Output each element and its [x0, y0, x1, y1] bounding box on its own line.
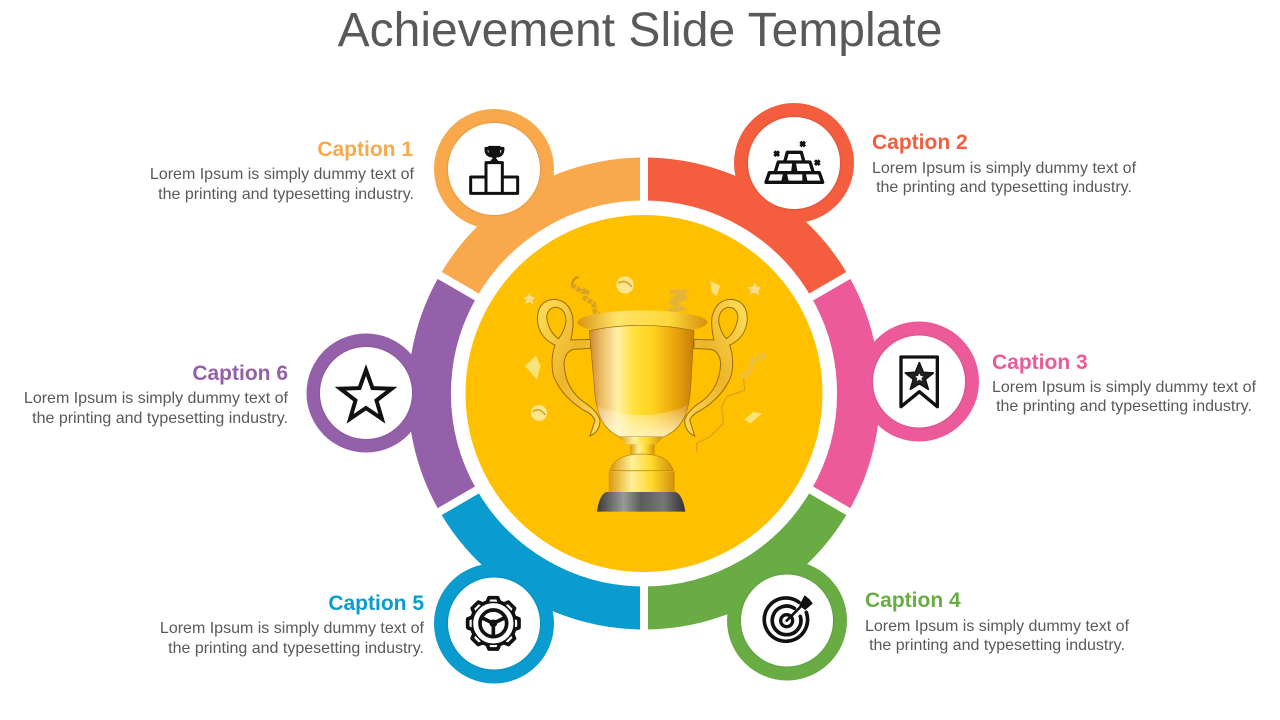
segment 4 green	[644, 501, 830, 608]
text: caption 2: Caption 2	[872, 131, 968, 154]
callout circle 2	[734, 103, 854, 223]
text: caption 4: Lorem Ipsum is simply dummy text of	[865, 618, 1130, 635]
text: caption 6: Lorem Ipsum is simply dummy text of	[24, 390, 289, 407]
text: caption 5: Caption 5	[328, 592, 424, 615]
text: caption 2: Lorem Ipsum is simply dummy text of	[872, 160, 1137, 177]
icon: gold bars	[766, 142, 823, 182]
title: Achievement Slide Template	[338, 4, 942, 57]
text: caption 1: Caption 1	[317, 138, 413, 161]
ring of six segments	[429, 179, 859, 608]
segment 5 blue	[458, 501, 644, 608]
text: caption 5: Lorem Ipsum is simply dummy text of	[160, 620, 425, 637]
callout circle 5	[434, 564, 554, 684]
text: caption 3	[992, 351, 1257, 415]
segment 2 red	[644, 179, 830, 286]
segment 3 pink	[830, 286, 859, 501]
text: caption 5	[160, 592, 425, 657]
rim	[577, 310, 707, 334]
callout circle 1	[434, 109, 554, 229]
text: caption 3: the printing and typesetting industry.	[996, 398, 1252, 415]
text: caption 1	[150, 138, 415, 203]
callout circle 6	[306, 334, 426, 452]
confetti	[523, 276, 765, 452]
text: caption 4	[865, 589, 1130, 654]
cup highlight	[596, 405, 688, 437]
text: caption 3: Caption 3	[992, 351, 1088, 374]
callout circle 4	[727, 560, 847, 680]
text: caption 6: Caption 6	[192, 362, 288, 385]
segment 6 purple	[429, 286, 458, 501]
text: caption 1: Lorem Ipsum is simply dummy text of	[150, 166, 415, 183]
icon: gear with steering wheel	[468, 598, 519, 649]
callout circle 3	[859, 322, 979, 442]
text: caption 6	[24, 362, 289, 427]
segment 1 orange	[458, 179, 644, 286]
icon: target with arrow	[764, 597, 811, 641]
icon: podium trophy	[471, 147, 518, 193]
text: caption 3: Lorem Ipsum is simply dummy text of	[992, 379, 1257, 396]
right handle	[685, 299, 747, 436]
text: caption 4: Caption 4	[865, 589, 961, 612]
stem	[618, 437, 663, 444]
text: caption 2: the printing and typesetting industry.	[876, 179, 1132, 196]
dome and foot	[610, 454, 673, 471]
black base	[597, 492, 685, 512]
text: caption 2	[872, 131, 1137, 196]
text: caption 5: the printing and typesetting industry.	[168, 640, 424, 657]
cup	[589, 325, 694, 437]
trophy illustration	[523, 276, 765, 512]
text: caption 6: the printing and typesetting industry.	[32, 410, 288, 427]
text: caption 4: the printing and typesetting industry.	[869, 637, 1125, 654]
text: caption 1: the printing and typesetting industry.	[158, 186, 414, 203]
left handle	[537, 299, 600, 436]
central yellow circle	[466, 215, 822, 572]
icon: star	[340, 370, 392, 419]
icon: star bookmark	[901, 357, 937, 407]
